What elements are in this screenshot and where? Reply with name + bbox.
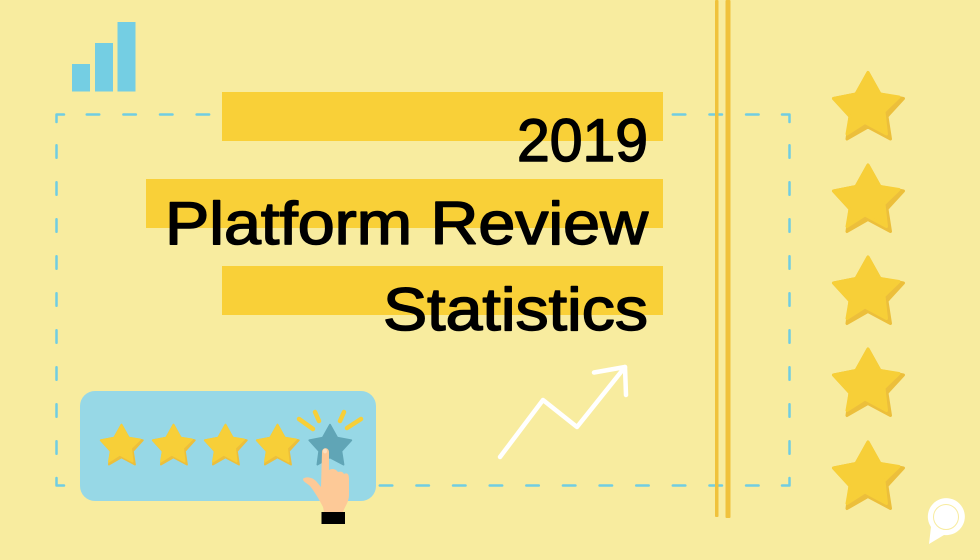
title: Platform Review — [165, 190, 649, 257]
vertical double line — [715, 0, 730, 518]
title: Statistics — [383, 276, 648, 343]
rising arrow — [500, 367, 626, 457]
cuff — [322, 512, 345, 524]
column of five stars — [834, 72, 904, 508]
title — [165, 107, 649, 343]
sparkle lines — [299, 412, 361, 429]
bar chart icon — [72, 22, 136, 92]
logo speech bubble — [928, 498, 965, 544]
dashed frame — [56, 114, 790, 486]
four yellow rating stars — [101, 425, 299, 465]
rating card — [80, 391, 376, 524]
pointing hand — [303, 448, 349, 512]
fingertip — [323, 448, 327, 454]
title: 2019 — [517, 107, 648, 174]
selected dark star — [309, 425, 351, 465]
title highlight bars — [146, 92, 663, 315]
